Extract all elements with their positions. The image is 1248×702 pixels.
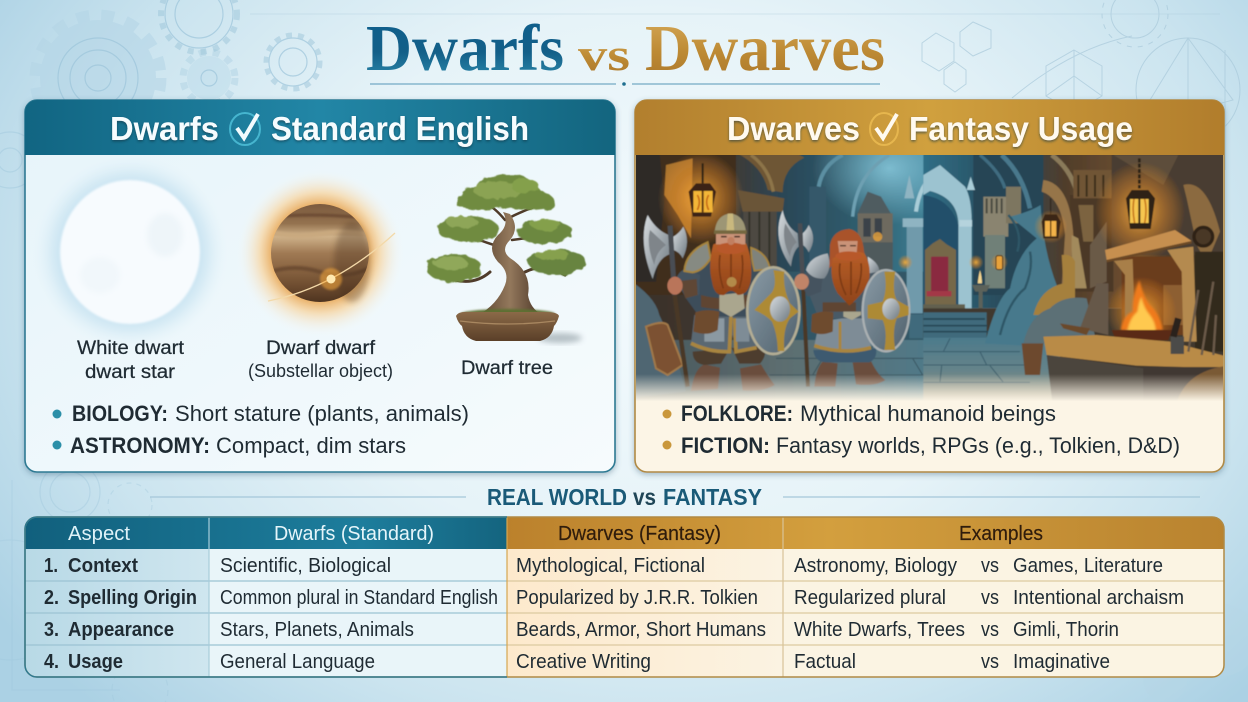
table row: appearance: Appearance <box>68 619 174 641</box>
panel header: Dwarves: Dwarves <box>727 110 860 147</box>
table row: context: Context <box>68 555 138 577</box>
table row: spelling origin: Intentional archaism <box>1013 587 1184 609</box>
boulders <box>1033 255 1075 315</box>
title: Dwarfs <box>366 12 564 85</box>
table row: usage: 4. <box>44 651 59 673</box>
forge fire <box>1112 280 1172 340</box>
table row: usage: General Language <box>220 651 375 673</box>
panel header: Dwarves: Fantasy Usage <box>909 110 1133 147</box>
bullet list: dwarves <box>662 401 1180 458</box>
section heading: real world vs fantasy: REAL WORLD <box>487 484 627 510</box>
table header row: Dwarfs (Standard) <box>274 523 434 545</box>
panel header: Dwarfs: Standard English <box>271 110 529 147</box>
table row: appearance: Stars, Planets, Animals <box>220 619 414 641</box>
title: vs <box>578 29 630 80</box>
table row: context: 1. <box>44 555 58 577</box>
bullet list: dwarves: FICTION: <box>681 433 770 458</box>
table row: usage: Factual <box>794 651 856 673</box>
bullet list: dwarves: Fantasy worlds, RPGs (e.g., Tolkien, D&D) <box>776 433 1180 458</box>
table row: usage: vs <box>981 651 999 673</box>
icon: white dwarf star <box>32 154 228 350</box>
table row: context: vs <box>981 555 999 577</box>
table header row: Dwarves (Fantasy) <box>558 523 721 545</box>
left cave wall <box>632 151 736 295</box>
label: white dwarf star: dwart star <box>85 362 176 383</box>
table row: context: Scientific, Biological <box>220 555 391 577</box>
table row: appearance: vs <box>981 619 999 641</box>
label: white dwarf star <box>77 338 185 383</box>
bullet list: dwarfs: Compact, dim stars <box>216 433 406 458</box>
brown arch and pillar <box>1070 195 1113 292</box>
dwarf one: shield <box>747 267 799 354</box>
table row: context: Mythological, Fictional <box>516 555 705 577</box>
table row: usage <box>44 651 1110 673</box>
label: white dwarf star: White dwart <box>77 338 185 359</box>
section heading: real world vs fantasy: FANTASY <box>663 484 762 510</box>
forge bench and tools <box>1021 281 1223 398</box>
table row: spelling origin: 2. <box>44 587 59 609</box>
scene left half <box>636 155 924 400</box>
table row: appearance: White Dwarfs, Trees <box>794 619 965 641</box>
floor and steps <box>909 314 924 338</box>
table header row <box>68 523 1043 545</box>
icon: bonsai dwarf tree <box>426 175 586 343</box>
label: dwarf dwarf: Dwarf dwarf <box>266 338 376 359</box>
icon: brown dwarf planet <box>244 178 396 329</box>
panel: Dwarfs standard English <box>25 100 615 472</box>
fireplace <box>1105 230 1197 347</box>
bullet list: dwarfs: BIOLOGY: <box>72 401 168 426</box>
table cell backgrounds <box>25 517 1224 677</box>
table row: usage: Imaginative <box>1013 651 1110 673</box>
table row: spelling origin: Spelling Origin <box>68 587 197 609</box>
table header row: Examples <box>959 523 1043 545</box>
table row: context <box>44 555 1163 577</box>
table row: spelling origin <box>44 587 1184 609</box>
bullet list: dwarfs <box>52 401 469 458</box>
table row: usage: Creative Writing <box>516 651 651 673</box>
panel header: Dwarves <box>635 100 1224 155</box>
panel header: Dwarfs <box>25 100 615 155</box>
section heading: real world vs fantasy <box>487 484 762 510</box>
hanging lantern <box>689 163 716 217</box>
blue rock formation <box>985 205 1061 346</box>
blue arches and building <box>810 187 822 261</box>
table row: context: Astronomy, Biology <box>794 555 957 577</box>
table row: usage: Usage <box>68 651 123 673</box>
stone wall and wall lantern <box>1112 155 1223 255</box>
panel header: Dwarfs: Dwarfs <box>110 110 219 147</box>
dwarf one: axe and figure <box>644 213 775 391</box>
table row: appearance: Gimli, Thorin <box>1013 619 1119 641</box>
label: dwarf dwarf: (Substellar object) <box>248 361 393 381</box>
scene right half: throne, lanterns, forge <box>923 151 1234 412</box>
illustration: dwarves in a stone hall <box>636 155 1223 400</box>
table row: spelling origin: Popularized by J.R.R. Tolkien <box>516 587 758 609</box>
title: Dwarves <box>645 12 885 85</box>
section heading: real world vs fantasy: vs <box>633 484 656 510</box>
dwarf two: shield <box>863 270 909 351</box>
table row: spelling origin: Common plural in Standard English <box>220 587 498 609</box>
mid lantern <box>1034 198 1067 243</box>
comparison table <box>25 517 1224 677</box>
table row: appearance: Beards, Armor, Short Humans <box>516 619 766 641</box>
tree foliage <box>426 175 586 282</box>
tree branches <box>436 205 565 281</box>
table row: appearance <box>44 619 1119 641</box>
table row: spelling origin: vs <box>981 587 999 609</box>
table row: appearance: 3. <box>44 619 59 641</box>
stone pillar and arch <box>743 212 777 266</box>
table row: spelling origin: Regularized plural <box>794 587 946 609</box>
left rocks and wooden tablet <box>636 284 684 392</box>
bullet list: dwarfs: ASTRONOMY: <box>70 433 210 458</box>
label: dwarf tree: Dwarf tree <box>461 358 553 379</box>
bullet list: dwarves: Mythical humanoid beings <box>800 401 1056 426</box>
title <box>366 12 885 85</box>
lower fade <box>636 374 1223 406</box>
table header row: Aspect <box>68 523 130 545</box>
bullet list: dwarves: FOLKLORE: <box>681 401 793 426</box>
table row: context: Games, Literature <box>1013 555 1163 577</box>
dwarf two: axe and figure <box>778 210 885 387</box>
label: dwarf dwarf <box>248 338 393 381</box>
bullet list: dwarfs: Short stature (plants, animals) <box>175 401 469 426</box>
panel: Dwarves fantasy usage <box>632 100 1234 472</box>
